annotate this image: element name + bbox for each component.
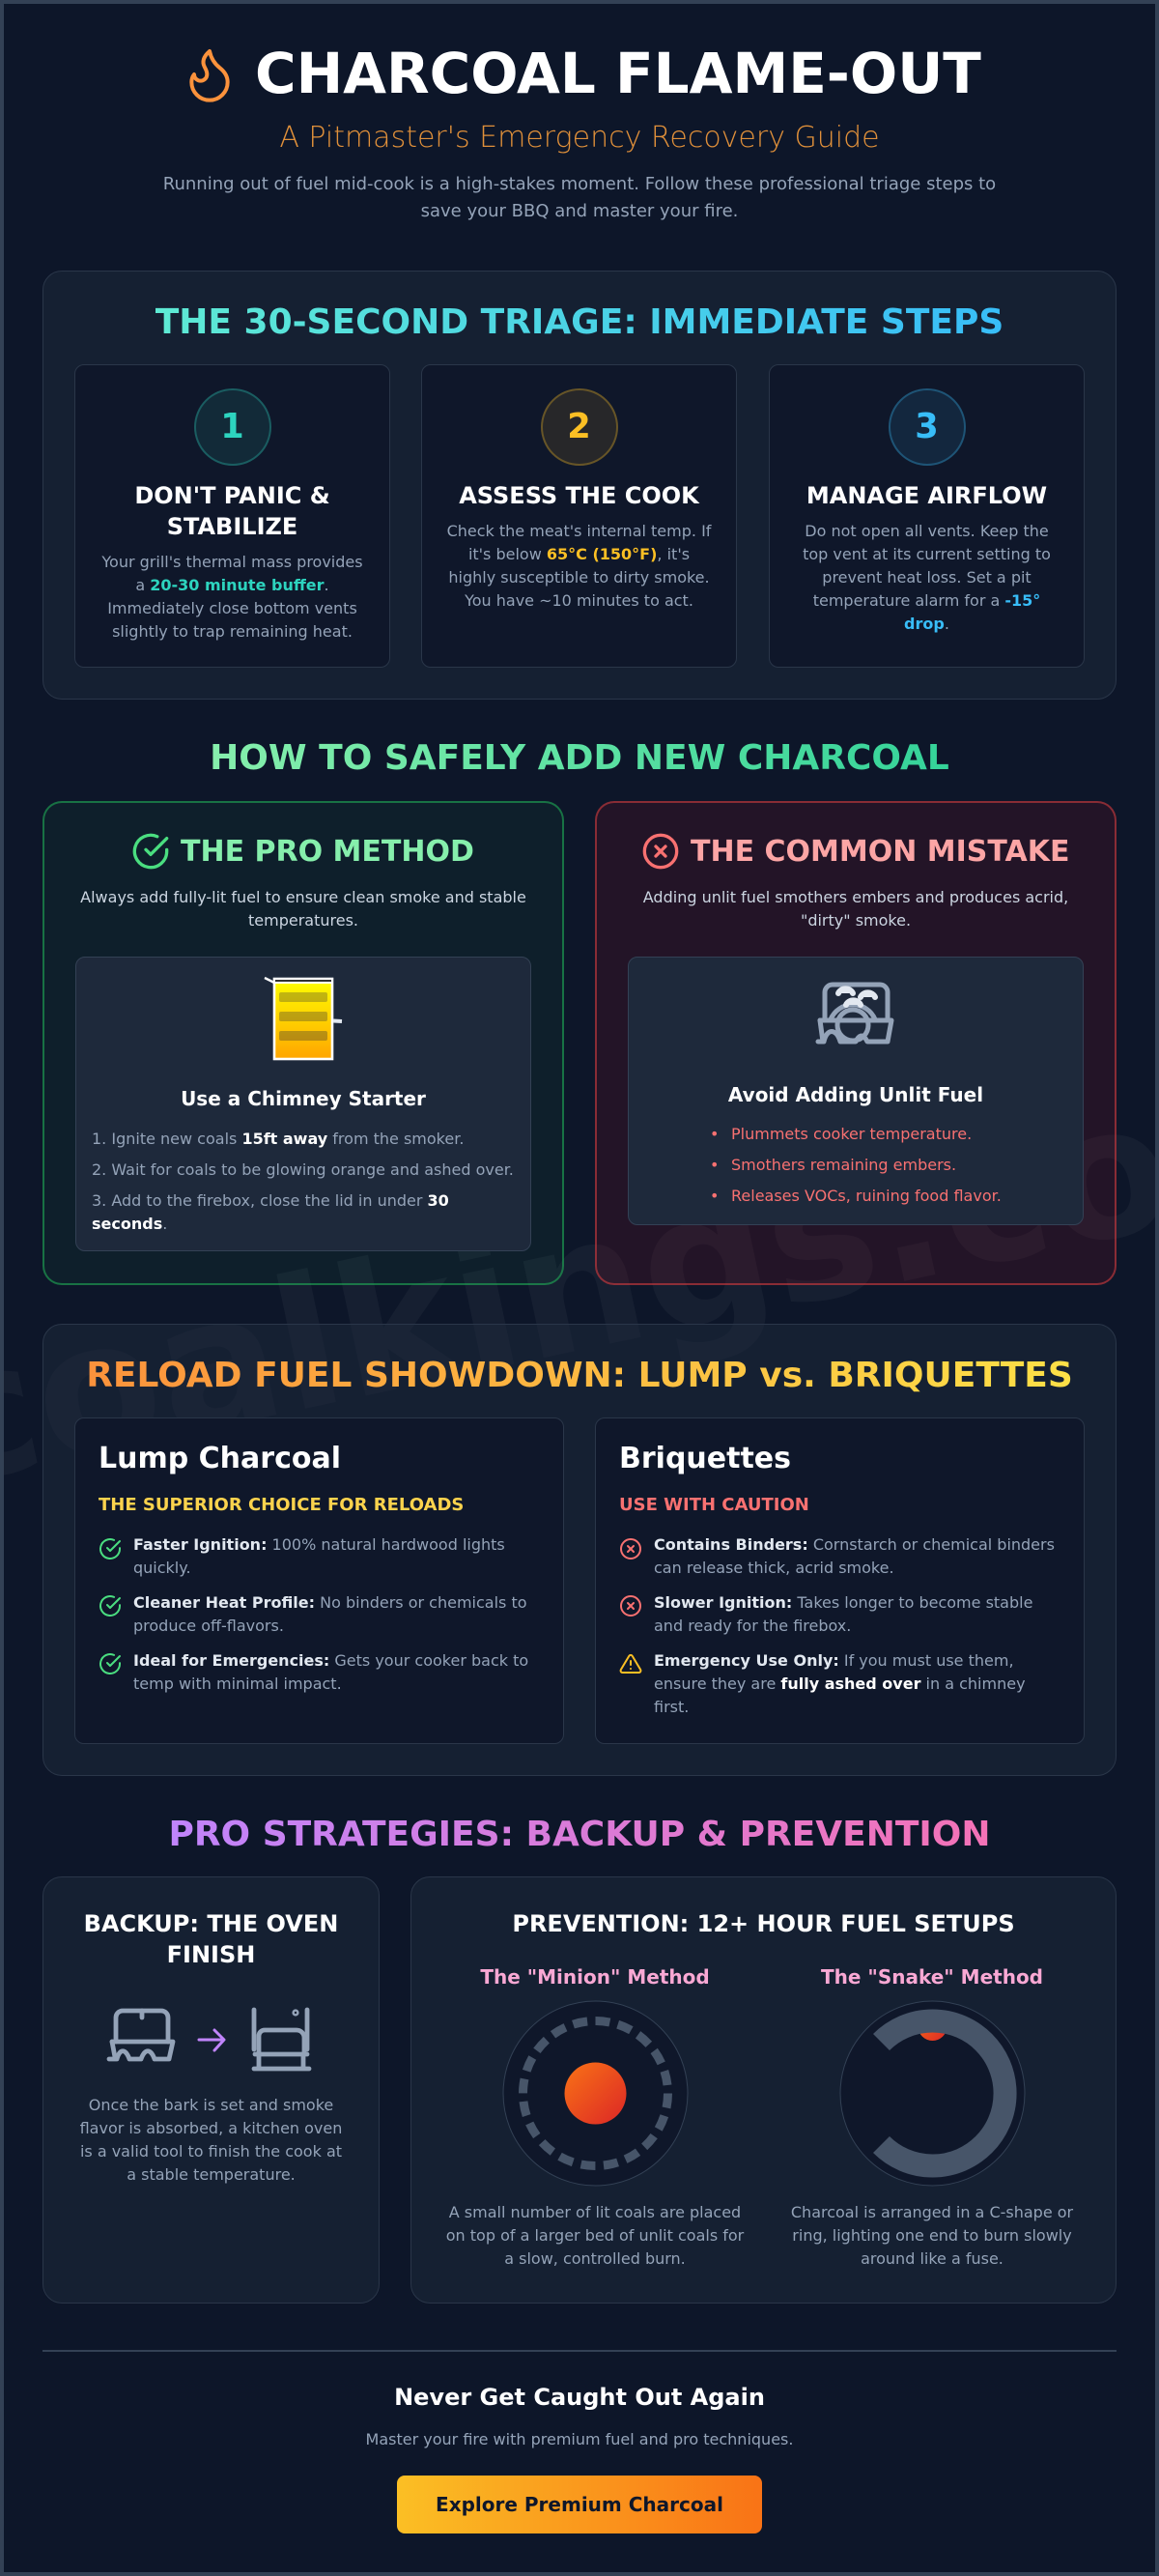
- step 2 heading: ASSESS THE COOK: [459, 482, 699, 509]
- lump point 1: quickly.: [133, 1559, 191, 1577]
- intro text: save your BBQ and master your fire.: [421, 201, 738, 220]
- step 2 text: [447, 522, 712, 609]
- panel: prevention fuel setups: [410, 1876, 1117, 2304]
- step 2 text: Check the meat's internal temp. If: [447, 522, 711, 539]
- title: CHARCOAL FLAME-OUT: [255, 41, 981, 106]
- panel: backup oven finish: [42, 1876, 380, 2304]
- chimney steps: 3. Add to the firebox, close the lid in under 30: [92, 1190, 449, 1210]
- icon: check: [99, 1653, 121, 1674]
- snake heading: The "Snake" Method: [821, 1965, 1043, 1989]
- icon: warning: [620, 1654, 641, 1674]
- mistake bullets: [710, 1125, 1002, 1205]
- icon: grill with smoke: [815, 982, 894, 1044]
- icon: chimney starter: [265, 976, 342, 1061]
- step number 3: 3: [915, 407, 939, 446]
- step number 1: [193, 388, 270, 466]
- briquettes point 3: Emergency Use Only: If you must use them,: [654, 1651, 1014, 1670]
- icon: x circle: [643, 833, 678, 870]
- step 3 text: top vent at its current setting to: [803, 545, 1051, 562]
- backup text: [80, 2096, 342, 2184]
- avoid heading: Avoid Adding Unlit Fuel: [728, 1083, 983, 1106]
- mistake bullets: Smothers remaining embers.: [731, 1156, 956, 1174]
- backup text: Once the bark is set and smoke: [89, 2096, 333, 2114]
- icon: grill to oven: [106, 2008, 311, 2072]
- briquettes subheading: USE WITH CAUTION: [619, 1494, 809, 1515]
- chimney steps: 1. Ignite new coals 15ft away from the smoker.: [92, 1129, 464, 1148]
- lump point 3: [133, 1651, 528, 1693]
- backup text: a stable temperature.: [127, 2165, 296, 2184]
- snake text: Charcoal is arranged in a C-shape or: [791, 2203, 1073, 2221]
- step 3 text: [803, 522, 1051, 632]
- briquettes point 3: [654, 1651, 1026, 1716]
- pro method intro: Always add fully-lit fuel to ensure clean smoke and stable: [80, 888, 526, 906]
- panel: the common mistake: [595, 801, 1117, 1285]
- icon: check circle: [133, 833, 168, 870]
- panel: fuel showdown: [42, 1324, 1117, 1776]
- step 3 text: temperature alarm for a -15°: [813, 591, 1040, 609]
- chimney heading: Use a Chimney Starter: [181, 1086, 426, 1109]
- lump point 1: Faster Ignition: 100% natural hardwood lights: [133, 1535, 505, 1554]
- step 1 heading: STABILIZE: [167, 513, 297, 540]
- minion text: A small number of lit coals are placed: [449, 2203, 741, 2221]
- briquettes point 3: first.: [654, 1698, 689, 1716]
- panel: 30-second triage: [42, 271, 1117, 700]
- footer heading: Never Get Caught Out Again: [394, 2384, 765, 2411]
- icon: check: [99, 1538, 121, 1560]
- briquettes heading: Briquettes: [619, 1442, 791, 1474]
- briquettes point 1: Contains Binders: Cornstarch or chemical binders: [654, 1535, 1055, 1554]
- mistake bullets: Plummets cooker temperature.: [731, 1125, 972, 1143]
- briquettes point 2: Slower Ignition: Takes longer to become stable: [654, 1593, 1032, 1612]
- step 1 text: Immediately close bottom vents: [107, 599, 357, 616]
- mistake intro: [643, 888, 1068, 930]
- step number 1: 1: [220, 407, 244, 446]
- chimney steps: 2. Wait for coals to be glowing orange and ashed over.: [92, 1159, 514, 1179]
- pro method intro: temperatures.: [248, 911, 358, 930]
- backup text: flavor is absorbed, a kitchen oven: [80, 2119, 342, 2137]
- button: [397, 2476, 762, 2533]
- card: step 1: [74, 364, 390, 668]
- subtitle: A Pitmaster's Emergency Recovery Guide: [279, 120, 880, 155]
- mistake bullets: •: [710, 1187, 719, 1205]
- mistake intro: Adding unlit fuel smothers embers and produces acrid,: [643, 888, 1068, 906]
- step 2 text: highly susceptible to dirty smoke.: [448, 568, 710, 586]
- heading: showdown: RELOAD FUEL SHOWDOWN: LUMP vs. BRIQUETTES: [86, 1356, 1073, 1395]
- lump point 3: Ideal for Emergencies: Gets your cooker back to: [133, 1651, 528, 1670]
- minion text: a slow, controlled burn.: [504, 2249, 686, 2268]
- chimney steps: [92, 1129, 514, 1233]
- footer text: Master your fire with premium fuel and pro techniques.: [366, 2430, 793, 2448]
- lump point 3: temp with minimal impact.: [133, 1674, 342, 1693]
- backup heading: BACKUP: THE OVEN: [84, 1910, 338, 1937]
- lump heading: Lump Charcoal: [99, 1442, 341, 1474]
- step 3 text: drop.: [904, 615, 949, 632]
- icon: x: [620, 1595, 641, 1617]
- briquettes point 1: [654, 1535, 1055, 1577]
- minion text: on top of a larger bed of unlit coals for: [446, 2226, 744, 2245]
- pro method intro: [80, 888, 526, 930]
- icon: flame: [189, 48, 230, 102]
- mistake heading: THE COMMON MISTAKE: [691, 835, 1070, 869]
- step 1 text: a 20-30 minute buffer.: [135, 576, 329, 593]
- briquettes point 2: and ready for the firebox.: [654, 1617, 851, 1635]
- snake text: around like a fuse.: [861, 2249, 1004, 2268]
- lump point 1: [133, 1535, 505, 1577]
- heading: pro strategies: PRO STRATEGIES: BACKUP & PREVENTION: [168, 1815, 991, 1853]
- step 1 heading: DON'T PANIC &: [134, 482, 330, 509]
- icon: x: [620, 1538, 641, 1560]
- step 2 text: it's below 65°C (150°F), it's: [468, 545, 690, 562]
- minion heading: The "Minion" Method: [480, 1965, 710, 1989]
- briquettes point 2: [654, 1593, 1032, 1635]
- mistake bullets: •: [710, 1156, 719, 1174]
- card: chimney starter: [75, 957, 531, 1251]
- diagram: snake method: [840, 2000, 1026, 2186]
- step 3 heading: MANAGE AIRFLOW: [806, 482, 1047, 509]
- chimney steps: seconds.: [92, 1214, 167, 1233]
- icon: check: [99, 1595, 121, 1617]
- intro text: [163, 174, 996, 220]
- step 3 text: Do not open all vents. Keep the: [805, 522, 1049, 539]
- briquettes point 3: ensure they are fully ashed over in a chimney: [654, 1674, 1026, 1693]
- pro method heading: THE PRO METHOD: [181, 835, 474, 869]
- prevention heading: PREVENTION: 12+ HOUR FUEL SETUPS: [512, 1909, 1015, 1936]
- heading: triage: THE 30-SECOND TRIAGE: IMMEDIATE STEPS: [155, 302, 1004, 342]
- card: step 3: [769, 364, 1085, 668]
- briquettes point 1: can release thick, acrid smoke.: [654, 1559, 894, 1577]
- lump subheading: THE SUPERIOR CHOICE FOR RELOADS: [99, 1494, 464, 1515]
- card: avoid unlit fuel: [628, 957, 1084, 1225]
- step 1 text: Your grill's thermal mass provides: [101, 553, 363, 570]
- lump point 2: produce off-flavors.: [133, 1617, 284, 1635]
- backup heading: FINISH: [167, 1941, 255, 1968]
- lump point 2: Cleaner Heat Profile: No binders or chemicals to: [133, 1593, 527, 1612]
- panel: the pro method: [42, 801, 564, 1285]
- intro text: Running out of fuel mid-cook is a high-stakes moment. Follow these professional triage steps to: [163, 174, 996, 193]
- mistake bullets: Releases VOCs, ruining food flavor.: [731, 1187, 1002, 1205]
- diagram: minion method: [502, 2000, 688, 2186]
- minion text: [446, 2203, 744, 2268]
- step number 2: 2: [567, 407, 591, 446]
- mistake intro: "dirty" smoke.: [801, 911, 911, 930]
- step number 3: [889, 388, 966, 466]
- step 1 heading: [134, 482, 330, 540]
- backup heading: [84, 1910, 338, 1968]
- mistake bullets: •: [710, 1125, 719, 1143]
- footer call to action: [42, 2350, 1117, 2533]
- step 1 text: slightly to trap remaining heat.: [112, 622, 353, 640]
- lump point 2: [133, 1593, 527, 1635]
- step number 2: [541, 388, 618, 466]
- heading: add new charcoal: HOW TO SAFELY ADD NEW CHARCOAL: [210, 738, 949, 777]
- step 3 text: prevent heat loss. Set a pit: [822, 568, 1032, 586]
- backup text: is a valid tool to finish the cook at: [80, 2142, 342, 2161]
- card: briquettes: [595, 1417, 1085, 1744]
- snake text: [791, 2203, 1074, 2268]
- step 1 text: [101, 553, 363, 640]
- button: Explore Premium Charcoal: [436, 2493, 723, 2516]
- snake text: ring, lighting one end to burn slowly: [792, 2226, 1072, 2245]
- card: lump charcoal: [74, 1417, 564, 1744]
- card: step 2: [421, 364, 737, 668]
- step 2 text: You have ~10 minutes to act.: [465, 591, 693, 609]
